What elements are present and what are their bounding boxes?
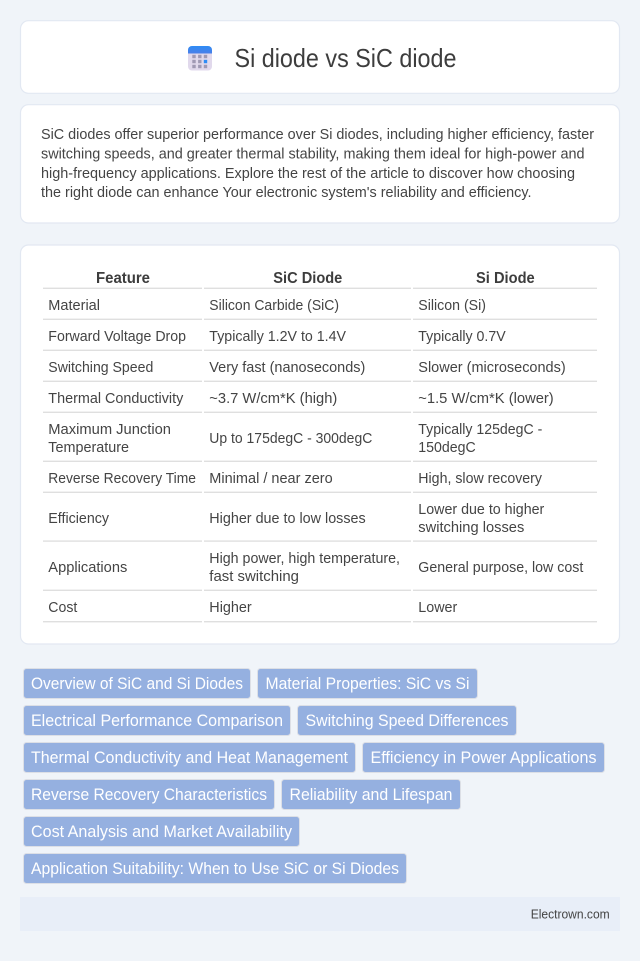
tag: efficiency <box>362 742 604 772</box>
row: applications <box>43 550 597 591</box>
panel: topic tags <box>24 668 604 884</box>
tag: overview <box>24 668 250 698</box>
tag: thermal conductivity <box>24 742 356 772</box>
intro paragraph <box>41 126 594 201</box>
tag: overview: Overview of SiC and Si Diodes <box>31 674 243 693</box>
intro paragraph: switching speeds, and greater thermal stability, making them ideal for high-power and <box>41 145 584 162</box>
panel: introduction <box>20 105 620 223</box>
row: cost: Higher <box>209 599 252 616</box>
row: applications: General purpose, low cost <box>418 559 584 576</box>
intro paragraph: the right diode can enhance Your electronic system's reliability and efficiency. <box>41 184 532 201</box>
title: Si diode vs SiC diode <box>234 45 456 73</box>
row: switching speed: Switching Speed <box>48 359 153 376</box>
row: applications: fast switching <box>209 568 299 585</box>
tag: reverse recovery: Reverse Recovery Characteristics <box>31 785 267 804</box>
row: material: Silicon Carbide (SiC) <box>209 297 339 314</box>
row: maximum junction temperature <box>43 421 597 462</box>
tag: cost analysis <box>24 816 300 846</box>
tag: material properties: Material Properties: SiC vs Si <box>266 674 470 693</box>
tag: efficiency: Efficiency in Power Applications <box>370 748 596 767</box>
row: maximum junction temperature: Up to 175degC - 300degC <box>209 430 372 447</box>
row: cost: Cost <box>48 599 78 616</box>
footer: Electrown.com <box>531 906 610 921</box>
row: efficiency <box>43 501 597 542</box>
row: switching speed: Very fast (nanoseconds) <box>209 359 365 376</box>
tag: cost analysis: Cost Analysis and Market Availability <box>31 822 293 841</box>
table header row: SiC Diode <box>273 270 342 287</box>
tag: switching speed: Switching Speed Differences <box>306 711 508 730</box>
intro paragraph: SiC diodes offer superior performance over Si diodes, including higher efficiency, faster <box>41 126 594 143</box>
table header row: Si Diode <box>476 270 535 287</box>
row: reverse recovery time: High, slow recovery <box>418 470 542 487</box>
tag: reliability: Reliability and Lifespan <box>290 785 452 804</box>
row: maximum junction temperature: Temperature <box>48 439 129 456</box>
row: maximum junction temperature: Typically 125degC - <box>418 421 542 438</box>
tag: application suitability: Application Suitability: When to Use SiC or Si Diodes <box>31 859 399 878</box>
row: efficiency: Lower due to higher <box>418 501 544 518</box>
row: maximum junction temperature: 150degC <box>418 439 476 456</box>
row: thermal conductivity: ~1.5 W/cm*K (lower) <box>418 390 554 407</box>
row: thermal conductivity <box>43 390 597 413</box>
row: material <box>43 297 597 320</box>
row: material: Silicon (Si) <box>418 297 486 314</box>
row: forward voltage drop <box>43 328 597 351</box>
tag: thermal conductivity: Thermal Conductivity and Heat Management <box>31 748 348 767</box>
row: efficiency: Higher due to low losses <box>209 510 366 527</box>
panel: header <box>20 21 620 93</box>
table header row: Feature <box>96 270 150 287</box>
footer <box>20 897 620 931</box>
tag: material properties <box>258 668 478 698</box>
row: reverse recovery time: Minimal / near zero <box>209 470 333 487</box>
intro paragraph: high-frequency applications. Explore the rest of the article to discover how choosing <box>41 165 575 182</box>
row: efficiency: switching losses <box>418 519 524 536</box>
row: applications: High power, high temperature, <box>209 550 400 567</box>
table header row <box>43 270 597 289</box>
row: forward voltage drop: Forward Voltage Drop <box>48 328 186 345</box>
row: cost: Lower <box>418 599 457 616</box>
row: maximum junction temperature: Maximum Junction <box>48 421 171 438</box>
row: reverse recovery time: Reverse Recovery Time <box>48 470 196 487</box>
icon: calendar <box>188 46 212 70</box>
row: material: Material <box>48 297 100 314</box>
tag: application suitability <box>24 854 406 884</box>
row: thermal conductivity: ~3.7 W/cm*K (high) <box>209 390 337 407</box>
row: thermal conductivity: Thermal Conductivity <box>48 390 184 407</box>
tag: reliability <box>282 780 460 810</box>
row: cost <box>43 599 597 622</box>
row: switching speed <box>43 359 597 382</box>
panel: comparison table <box>20 245 620 644</box>
row: switching speed: Slower (microseconds) <box>418 359 566 376</box>
row: applications: Applications <box>48 559 127 576</box>
tag: reverse recovery <box>24 780 274 810</box>
row: efficiency: Efficiency <box>48 510 109 527</box>
row: reverse recovery time <box>43 470 597 493</box>
tag: electrical performance: Electrical Performance Comparison <box>31 711 283 730</box>
tag: switching speed <box>298 706 516 736</box>
row: forward voltage drop: Typically 0.7V <box>418 328 506 345</box>
row: forward voltage drop: Typically 1.2V to 1.4V <box>209 328 346 345</box>
tag: electrical performance <box>24 706 290 736</box>
